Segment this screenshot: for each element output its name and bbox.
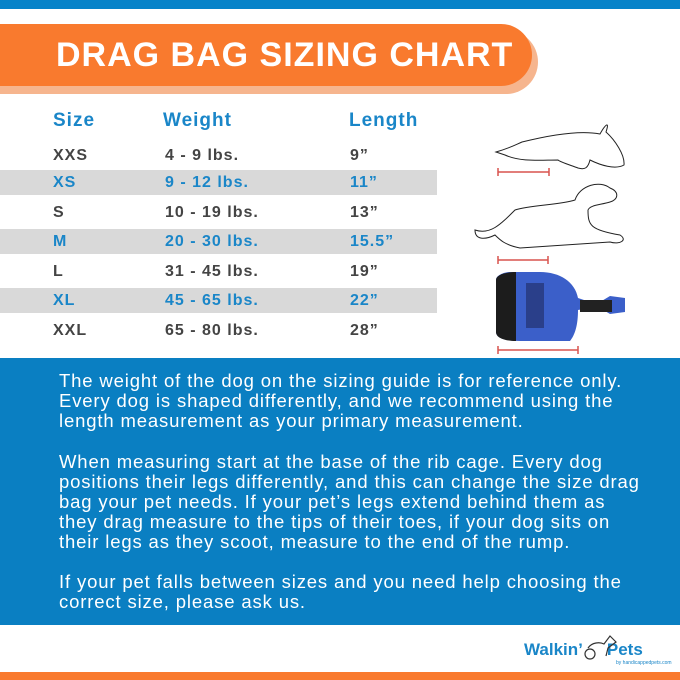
sizing table: 13” (350, 204, 379, 221)
sizing table: 15.5” (350, 233, 394, 250)
sizing table: 19” (350, 263, 379, 280)
sizing table: 22” (350, 292, 379, 309)
info panel (0, 358, 680, 625)
sizing table: XL (53, 292, 75, 309)
sizing table: 9 - 12 lbs. (165, 174, 249, 191)
paragraph 2: positions their legs differently, and this can change the size drag (59, 471, 640, 492)
top blue bar (0, 0, 680, 9)
sizing table: Length (349, 110, 418, 131)
paragraph 1: The weight of the dog on the sizing guide is for reference only. (59, 370, 622, 391)
sizing table: 28” (350, 322, 379, 339)
paragraph 3: If your pet falls between sizes and you need help choosing the (59, 571, 622, 592)
sizing table (0, 110, 437, 339)
title banner: DRAG BAG SIZING CHART (56, 36, 513, 74)
paragraph 1: length measurement as your primary measurement. (59, 410, 524, 431)
bottom orange bar (0, 672, 680, 680)
sizing table: 20 - 30 lbs. (165, 233, 259, 250)
sizing table: Weight (163, 110, 232, 131)
sizing table: 65 - 80 lbs. (165, 322, 259, 339)
paragraph 3: correct size, please ask us. (59, 591, 306, 612)
sizing table: XXS (53, 147, 88, 164)
logo: by handicappedpets.com (616, 660, 672, 666)
paragraph 2: their legs as they scoot, measure to the end of the rump. (59, 531, 570, 552)
paragraph 3 (59, 571, 622, 612)
logo: Walkin’ Pets (524, 640, 643, 659)
sizing table: Size (53, 110, 95, 131)
paragraph 2: When measuring start at the base of the rib cage. Every dog (59, 451, 603, 472)
sizing table: 45 - 65 lbs. (165, 292, 259, 309)
sizing table: XS (53, 174, 76, 191)
sizing table: 10 - 19 lbs. (165, 204, 259, 221)
sizing table: S (53, 204, 65, 221)
sizing table: 9” (350, 147, 369, 164)
logo (524, 635, 672, 666)
paragraph 2: bag your pet needs. If your pet’s legs extend behind them as (59, 491, 605, 512)
paragraph 2 (59, 451, 640, 552)
paragraph 1 (59, 370, 622, 431)
sizing table: XXL (53, 322, 87, 339)
sizing table: 4 - 9 lbs. (165, 147, 239, 164)
sizing table: M (53, 233, 67, 250)
sizing table: 11” (350, 174, 378, 191)
sizing table: 31 - 45 lbs. (165, 263, 259, 280)
sizing table: L (53, 263, 64, 280)
title banner (0, 24, 538, 94)
paragraph 2: they drag measure to the tips of their toes, if your dog sits on (59, 511, 610, 532)
illustrations: dogs and drag bag (474, 124, 625, 354)
paragraph 1: Every dog is shaped differently, and we recommend using the (59, 390, 613, 411)
